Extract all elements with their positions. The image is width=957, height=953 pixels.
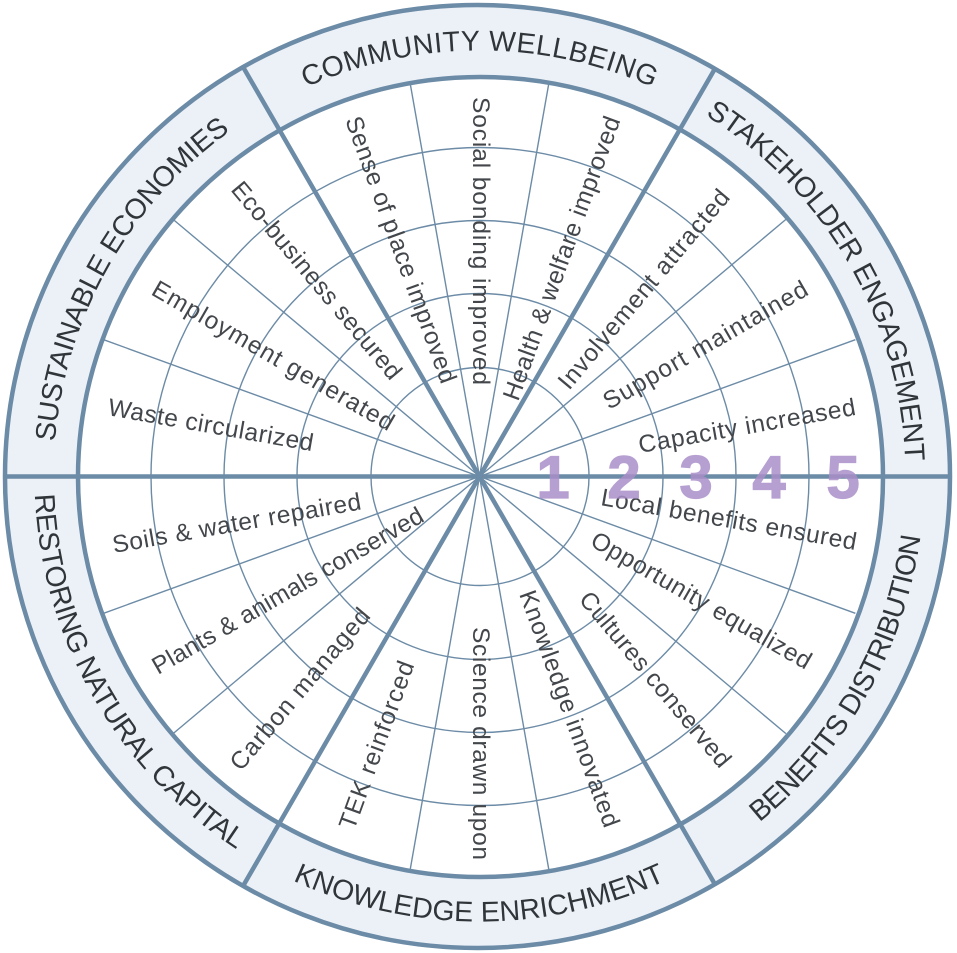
label: Soils & water repaired: Soils & water repaired [110,489,363,559]
score scale numbers 1 to 5: 5 [826,444,860,511]
label: Capacity increased: Capacity increased [636,394,858,459]
heading: Restoring Natural Capital: RESTORING NATURAL CAPITAL [34,496,239,849]
score scale numbers 1 to 5: 3 [679,444,713,511]
label: Health & welfare improved: Health & welfare improved [498,113,626,404]
score scale numbers 1 to 5: 4 [752,444,786,511]
label: Carbon managed: Carbon managed [225,603,376,776]
label: Waste circularized: Waste circularized [106,394,315,457]
label: Involvement attracted: Involvement attracted [553,184,736,395]
label: Cultures conserved: Cultures conserved [573,587,736,773]
wheel: inner white disc [78,77,883,877]
label: Sense of place improved: Sense of place improved [339,113,461,387]
score scale numbers 1 to 5 [536,444,860,511]
label: Eco-business secured: Eco-business secured [225,177,407,385]
label: Science drawn upon: Science drawn upon [467,627,494,860]
label: Local benefits ensured: Local benefits ensured [599,484,859,556]
heading: Community Wellbeing: COMMUNITY WELLBEING [302,30,656,84]
thin spokes separating indicators [104,83,855,870]
heading: Stakeholder Engagement: STAKEHOLDER ENGAGEMENT [708,102,925,460]
label: Plants & animals conserved: Plants & animals conserved [148,502,429,680]
score scale numbers 1 to 5: 1 [536,444,570,511]
label: Support maintained: Support maintained [598,276,813,415]
label: Knowledge innovated: Knowledge innovated [513,587,624,831]
label: Employment generated: Employment generated [147,276,399,437]
label: Social bonding improved: Social bonding improved [467,97,494,385]
concentric score rings [151,148,809,806]
score scale numbers 1 to 5: 2 [607,444,641,511]
label: Opportunity equalized: Opportunity equalized [586,527,816,675]
heading: Benefits Distribution: BENEFITS DISTRIBUTION [748,536,920,821]
label: TEK reinforced: TEK reinforced [334,657,420,833]
heading: Knowledge Enrichment: KNOWLEDGE ENRICHMENT [294,863,660,922]
heading: Sustainable Economies: SUSTAINABLE ECONOMIES [36,118,228,440]
